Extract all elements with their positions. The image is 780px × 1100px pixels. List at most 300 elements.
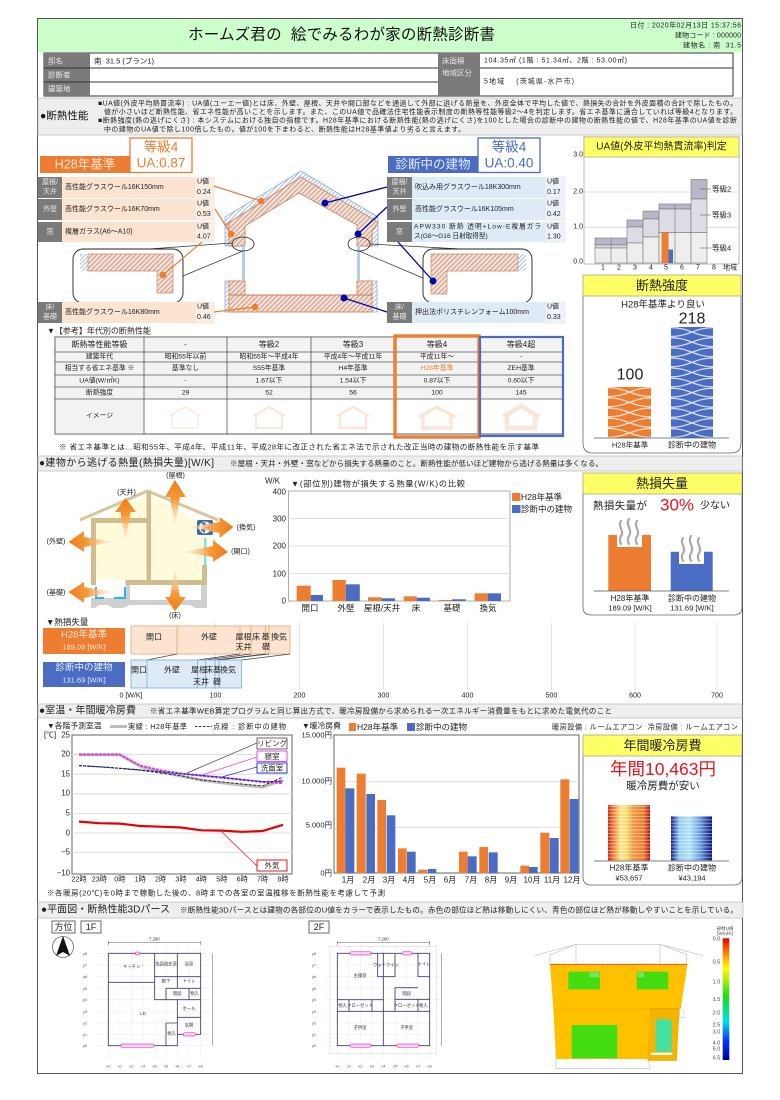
axis labels: x8 [199, 1063, 204, 1068]
card: floor/foundation: 基礎 [392, 312, 406, 320]
panel header: 断熱強度 [636, 278, 688, 293]
bar: H28: 100 [617, 366, 643, 384]
panel: heat loss: 熱損失量が [593, 499, 648, 512]
card: exterior wall: 高性能グラスウール16K105mm [415, 204, 514, 213]
card: window: APW330 断熱 透明+Low-E複層ガラ [414, 222, 541, 230]
card: floor/foundation: 床/ [395, 303, 404, 311]
building info table: 邸名 [48, 56, 63, 66]
axis labels: x3 [370, 1063, 375, 1068]
legend: 点線 : 診断中の建物 [213, 722, 286, 731]
part labels [47, 470, 255, 620]
card: window: 窓 [46, 226, 54, 236]
stacked heat loss bars [43, 617, 723, 700]
table text: 基準なし [172, 363, 199, 372]
axis labels: 0 [W/K] [120, 692, 143, 700]
table text: H4年基準 [338, 363, 368, 372]
room labels: 7,280 [378, 936, 389, 941]
axis labels [302, 730, 332, 878]
leader lines: diagnosed [322, 187, 436, 312]
part labels: (床) [169, 612, 181, 620]
room labels: クローゼット [347, 1002, 373, 1009]
spec cards: diagnosed building [387, 176, 565, 323]
table text: 29 [182, 390, 189, 396]
part labels: (天井) [117, 488, 136, 496]
card: floor/foundation [38, 302, 214, 323]
bar chart: heat loss by part: 400 [273, 488, 287, 496]
legend [349, 722, 468, 732]
panel: insulation strength [583, 275, 741, 453]
month labels: 8月 [485, 876, 497, 884]
U-value colour scale legend: 部材U値 [717, 925, 734, 932]
category labels: 床 [412, 603, 421, 613]
axis labels: 1.0 [573, 224, 583, 230]
section heading: room temperature and cost [38, 704, 742, 718]
panel: annual cost: ¥53,657 [615, 874, 643, 882]
card: floor/foundation: 床/ [46, 303, 55, 311]
bar: H28 [608, 805, 650, 861]
month labels: 4月 [403, 876, 415, 884]
leader lines: H28 [160, 186, 264, 312]
category labels [301, 603, 497, 613]
room labels: 物入 [190, 990, 200, 997]
axis labels: y6 [83, 974, 88, 979]
building info table: 地域区分 [442, 68, 472, 78]
table text: 平成11年～ [420, 352, 454, 360]
axis labels: 4 [649, 264, 653, 272]
panel: annual cost [583, 735, 742, 885]
axis labels [120, 692, 723, 700]
bar chart: monthly cost: ▼暖冷房費 [302, 720, 341, 730]
card: window: 複層ガラス(A6～A10) [65, 226, 133, 236]
roof and frame [80, 491, 218, 520]
explanation text [98, 98, 737, 134]
axis labels: y6 [312, 974, 317, 979]
room labels: 階段 [173, 990, 182, 997]
U-value colour scale legend: 2.0 [713, 1011, 720, 1017]
panel header [584, 137, 739, 157]
foundation insulation [96, 587, 125, 598]
table text: 56 [349, 390, 357, 396]
bar chart: heat loss by part [265, 476, 573, 613]
panel header [583, 735, 742, 756]
line chart: room temperature: 1時 [135, 874, 146, 884]
axis labels: 10.000円 [302, 776, 332, 786]
floor plan 1F [81, 921, 213, 1068]
U-value colour scale legend: 1.5 [713, 997, 720, 1003]
foundation [91, 585, 207, 608]
legend: 診断中の建物 [416, 722, 468, 732]
table text: - [520, 354, 522, 360]
table text: 等級2 [259, 339, 280, 349]
label: H28 standard grade [40, 138, 192, 173]
table text: 等級4 [427, 339, 448, 349]
axis labels: y4 [83, 997, 88, 1002]
table grid [55, 337, 563, 434]
month labels: 5月 [424, 876, 436, 884]
panel: annual cost: H28年基準 [610, 862, 648, 872]
report meta [630, 20, 741, 50]
cup: diagnosed [671, 552, 713, 591]
card: exterior wall: 高性能グラスウール16K70mm [65, 204, 160, 213]
header band [38, 19, 742, 52]
month labels: 2月 [363, 876, 375, 884]
table text: 昭和55年～平成4年 [240, 352, 299, 360]
axis labels: 0円 [320, 868, 332, 878]
chart gridlines [584, 192, 739, 227]
walls [108, 953, 201, 1046]
stacked bar: H28: 外壁 [201, 632, 217, 642]
table text: ZEH基準 [507, 363, 535, 372]
line chart: room temperature: 7時 [257, 874, 268, 884]
axis labels: y7 [312, 962, 317, 967]
floor plan 1F: 1F [86, 922, 97, 932]
panel: annual cost: 診断中の建物 [668, 862, 716, 872]
roof wireframe [534, 944, 703, 1068]
axis labels: y4 [312, 997, 317, 1002]
series callouts: 洗面室 [261, 762, 284, 772]
bars [297, 580, 488, 601]
table text: - [184, 378, 187, 384]
axis labels [44, 730, 71, 878]
floor plan 2F [309, 921, 442, 1068]
card: roof/ceiling: U値 [197, 176, 209, 186]
card: roof/ceiling: 屋根/ [392, 177, 408, 186]
line chart: room temperature: 3時 [175, 874, 187, 884]
card: window: U値 [547, 222, 559, 230]
category labels: 換気 [479, 603, 497, 613]
card: window: U値 [197, 222, 209, 230]
bar chart: monthly cost [302, 720, 738, 884]
line chart: room temperature: ▼各階予測室温 [47, 720, 102, 730]
title: ホームズ君の 絵でみるわが家の断熱診断書 [188, 26, 495, 44]
panel: heat loss: 30% [660, 496, 694, 514]
axis labels: x2 [358, 1063, 363, 1068]
panel header [583, 275, 741, 296]
card: floor/foundation [387, 302, 565, 323]
card: exterior wall: 外壁 [392, 204, 406, 213]
panel: heat loss: 131.69 [W/K] [670, 604, 714, 612]
section heading: heat loss: ※屋根・天井・外壁・窓などから損失する熱量のこと。断熱性能が低いほど建物から逃げる熱量は多くなる。 [230, 458, 603, 468]
house cross-section diagram [225, 171, 378, 312]
month labels: 1月 [342, 876, 354, 884]
detail ellipses [232, 237, 254, 251]
axis labels: 0.0 [573, 258, 583, 266]
axis labels: −10 [57, 868, 71, 878]
panel: insulation strength: 診断中の建物 [668, 440, 716, 450]
bar chart: monthly cost: 暖房設備 : ルームエアコン 冷房設備 : ルームエアコン [552, 722, 738, 732]
axis labels: y1 [312, 1032, 317, 1037]
panel: insulation strength: H28年基準 [612, 440, 649, 450]
card: exterior wall: 0.42 [547, 211, 561, 218]
axis labels: 5.000円 [306, 820, 332, 830]
axis labels: x0 [106, 1063, 111, 1068]
outer hatch layer [225, 171, 378, 246]
card: window: 窓 [396, 226, 403, 236]
compass: 方位 [54, 921, 73, 932]
line chart: room temperature [44, 720, 292, 884]
axis labels: 3 [633, 264, 637, 272]
U-value colour scale legend: 1.0 [713, 980, 720, 986]
room labels: 子供室 [354, 1024, 367, 1031]
window detail callout right [359, 244, 532, 303]
stacked bar: diagnosed: 外壁 [164, 664, 180, 674]
line chart: room temperature: 5時 [216, 874, 227, 884]
U-value colour scale legend: 6.5 [713, 1055, 720, 1061]
monthly bars [337, 768, 578, 873]
table text: - [184, 340, 187, 349]
bar chart: heat loss by part: 0 [282, 596, 287, 606]
axis labels: x7 [187, 1063, 192, 1068]
building info table [44, 53, 733, 96]
line chart: room temperature: 22時 [71, 874, 87, 884]
U-value colour scale legend: 4.0 [713, 1040, 720, 1046]
stacked bar: H28: 屋根 [236, 632, 252, 642]
axis labels: 地域 [723, 262, 737, 272]
room labels: 階段 [402, 990, 412, 997]
room labels: 物入 [338, 1002, 348, 1009]
axis labels: x5 [393, 1063, 398, 1068]
U-value colour scale legend: 3.0 [713, 1030, 720, 1036]
axis labels: 5 [664, 264, 668, 272]
axis labels [83, 951, 204, 1068]
table text: 等級4超 [507, 339, 535, 349]
U-value colour scale legend: 0.0 [713, 936, 720, 942]
card: exterior wall: 0.53 [197, 211, 211, 218]
line chart: room temperature: 8時 [277, 874, 289, 884]
panel: heat loss: H28年基準 [611, 593, 649, 603]
axis labels: y3 [312, 1009, 317, 1014]
panel: heat loss [583, 473, 742, 615]
card: floor/foundation: 押出法ポリスチレンフォーム100mm [415, 307, 529, 316]
legend: 診断中の建物 [521, 504, 573, 514]
room labels [338, 936, 430, 1031]
room labels: 廊下 [162, 977, 171, 984]
room labels: 物入 [419, 1002, 428, 1009]
axis labels: 2 [617, 264, 621, 272]
U-value colour scale legend: 2.5 [713, 1022, 720, 1028]
month labels [342, 876, 580, 884]
card: window: ス(G8～G16 日射取得型) [414, 231, 488, 240]
windows [350, 952, 419, 1047]
axis labels: 25 [61, 730, 71, 740]
card: floor/foundation: 0.46 [197, 314, 211, 321]
axis labels: 300 [378, 692, 389, 700]
axis labels: 200 [294, 692, 305, 700]
stacked bar: H28 [131, 626, 290, 654]
axis labels: 6 [680, 264, 684, 272]
table text: 100 [431, 390, 443, 396]
ventilation fan icon [197, 520, 213, 535]
panel: heat loss: 診断中の建物 [668, 593, 716, 603]
category labels: 開口 [301, 603, 319, 613]
stacked bar: H28: 礎 [262, 642, 270, 652]
room labels: クローゼット [394, 1002, 420, 1009]
stacked bar: H28: 開口 [146, 632, 162, 642]
walls [337, 953, 430, 1046]
table text: イメージ [86, 412, 113, 420]
room labels: キッチン [123, 964, 140, 969]
axis labels [312, 951, 433, 1068]
part labels: (基礎) [47, 588, 65, 596]
axis labels: x7 [416, 1063, 421, 1068]
cup: H28 [608, 535, 651, 591]
room labels: 浴室 [185, 960, 194, 967]
axis labels: x2 [129, 1063, 134, 1068]
card: exterior wall: U値 [547, 198, 559, 208]
windows [121, 952, 196, 1047]
room labels: 7,280 [149, 936, 160, 941]
era reference table: ※ 省エネ基準とは…昭和55年、平成4年、平成11年、平成28年に改正された省エネ法で示された改正当時の建物の断熱性能を示す基準 [59, 442, 539, 452]
report meta: 建物コード : 000000 [675, 30, 741, 40]
room labels [123, 936, 200, 1037]
window detail callout left [73, 243, 243, 303]
card: roof/ceiling: 高性能グラスウール16K150mm [65, 182, 164, 191]
explanation text: ■断熱強度(熱の逃げにくさ) : 本システムにおける独自の指標です。H28年基準における断熱性能(熱の逃げにくさ)を100とした場合の診断中の建物の断熱性能の値で、H28年基準のUA値を診断 [98, 116, 737, 124]
panel: annual cost: 年間10,463円 [610, 759, 716, 779]
label: diagnosed building grade: 診断中の建物 [395, 156, 471, 172]
table text: 1.67以下 [256, 376, 283, 384]
table text: 建築年代 [86, 352, 113, 360]
axis labels: 500 [546, 692, 557, 700]
dimension lines [337, 941, 441, 1046]
bar chart: heat loss by part: 100 [273, 570, 287, 578]
category labels: 外壁 [337, 603, 355, 613]
axis labels: 1 [601, 264, 605, 272]
table text: 断熱強度 [86, 388, 113, 396]
axis labels: x4 [381, 1063, 386, 1068]
bar chart: heat loss by part: 300 [273, 514, 287, 524]
panel: insulation strength: H28年基準より良い [621, 298, 705, 310]
axis labels: 100 [210, 692, 221, 700]
month labels: 6月 [444, 876, 456, 884]
stacked bar: H28: 基 [262, 632, 270, 642]
legend [110, 722, 286, 731]
report meta: 日付 : 2020年02月13日 15:37:56 [630, 20, 741, 30]
room labels: ホール [183, 1006, 196, 1011]
stacked bar: diagnosed: 床 [205, 666, 213, 674]
axis labels: y1 [83, 1032, 88, 1037]
axis labels: x8 [428, 1063, 433, 1068]
label: diagnosed: 131.69 [W/K] [62, 676, 106, 684]
panel header [583, 473, 742, 494]
steam icons [620, 519, 700, 561]
explanation text: ■UA値(外皮平均熱貫流率) : UA値(ユーエー値)とは床、外壁、屋根、天井や開口部などを通過して外部に逃げる熱量を、外皮全体で平均した値で、熱損失の合計を外皮面積の合計で除したもの。 [98, 98, 737, 108]
stacked bar: diagnosed: 開口 [131, 666, 147, 674]
legend: H28年基準 [521, 492, 563, 502]
axis labels: x6 [175, 1063, 180, 1068]
section heading: insulation performance: ●断熱性能 [40, 109, 89, 122]
explanation text: 値が小さいほど断熱性能、省エネ性能が高いことを示します。また、このUA値で品確法住宅性能表示制度の断熱等性能等級2～4を判定します。省エネ基準に適合していれば等級4となります。 [104, 107, 737, 116]
stacked bar: diagnosed [131, 660, 242, 688]
building info table: 104.35㎡ (1階 : 51.34㎡、2階 : 53.00㎡) [484, 56, 627, 64]
part labels: (開口) [231, 548, 250, 556]
card: roof/ceiling: 屋根/ [42, 177, 58, 186]
stacked bar: H28: 換気 [271, 632, 287, 642]
axis labels: 10 [61, 788, 71, 798]
part labels: (換気) [237, 522, 255, 532]
label: H28: 189.09 [W/K] [62, 642, 106, 652]
insulation layer [225, 177, 378, 246]
label: diagnosed building grade: 等級4 [492, 138, 527, 154]
era reference table [47, 326, 563, 452]
label: diagnosed: 診断中の建物 [55, 662, 113, 674]
table text: 相当する省エネ基準 ※ [65, 363, 134, 372]
U-value colour scale legend: 0.5 [713, 960, 720, 966]
building info table: 床面積 [442, 56, 465, 66]
table text: 0.87以下 [424, 376, 451, 384]
door [656, 1019, 672, 1052]
section heading: heat loss: ●建物から逃げる熱量(熱損失量)[W/K] [39, 456, 214, 469]
card: roof/ceiling [387, 176, 565, 198]
era reference table: ▼【参考】年代別の断熱性能 [47, 326, 151, 336]
table text: H28年基準 [421, 363, 454, 372]
grade labels: 等級2 [712, 184, 731, 194]
grade labels: 等級3 [712, 210, 731, 220]
spec cards: H28 standard [38, 176, 214, 323]
section heading: insulation performance [38, 98, 742, 135]
building info table: 建築地 [48, 84, 71, 94]
table text [65, 339, 535, 420]
panel header: 熱損失量 [636, 476, 688, 491]
part labels: (外壁) [47, 536, 65, 546]
panel: heat loss: 189.09 [W/K] [608, 604, 652, 612]
3D building perspective [534, 944, 703, 1068]
U-value colour scale legend: 5.0 [713, 1046, 720, 1052]
axis labels: x4 [153, 1063, 158, 1068]
card: exterior wall [387, 198, 565, 220]
U-value colour scale legend [713, 925, 734, 1061]
card: exterior wall: U値 [197, 198, 209, 208]
label: H28 standard grade: 等級4 [144, 138, 179, 154]
room labels: トイレ [418, 961, 430, 966]
axis labels: −5 [61, 848, 71, 856]
panel: annual cost: 暖冷房費が安い [626, 779, 700, 792]
windows [244, 246, 358, 281]
floor plan 2F: 2F [314, 922, 325, 932]
label: diagnosed building grade [388, 138, 540, 173]
room labels: LD [140, 1011, 146, 1016]
bar chart: heat loss by part: ▼(部位別)建物が損失する熱量(W/K)の比較 [291, 478, 465, 488]
axis labels: x3 [141, 1063, 146, 1068]
compass [52, 921, 75, 958]
month labels: 3月 [383, 876, 395, 884]
card: floor/foundation: U値 [547, 302, 559, 310]
month labels: 10月 [524, 876, 540, 884]
axis labels: 0 [66, 828, 71, 838]
axis labels: 400 [462, 692, 473, 700]
bar: H28 [608, 366, 651, 438]
card: roof/ceiling: 天井 [392, 186, 406, 196]
card: exterior wall: 外壁 [43, 204, 57, 213]
card: roof/ceiling: 吹込み用グラスウール18K300mm [415, 182, 521, 191]
axis labels: y0 [312, 1043, 317, 1048]
legend: H28年基準 [357, 722, 399, 732]
stacked bar: diagnosed: 換気 [220, 664, 236, 674]
legend: 実線 : H28年基準 [128, 722, 187, 731]
table text: 52 [265, 390, 273, 396]
legend [512, 492, 573, 514]
axis labels: x1 [347, 1063, 352, 1068]
table text: 145 [515, 390, 527, 396]
axis labels: x6 [405, 1063, 410, 1068]
axis labels [573, 152, 737, 272]
axis labels: 7 [696, 264, 700, 272]
table text: 0.60以下 [508, 376, 535, 384]
walls [550, 965, 687, 1009]
axis labels: 700 [711, 692, 723, 700]
bar chart: heat loss by part: 200 [273, 542, 287, 550]
heat loss arrows [69, 480, 233, 611]
